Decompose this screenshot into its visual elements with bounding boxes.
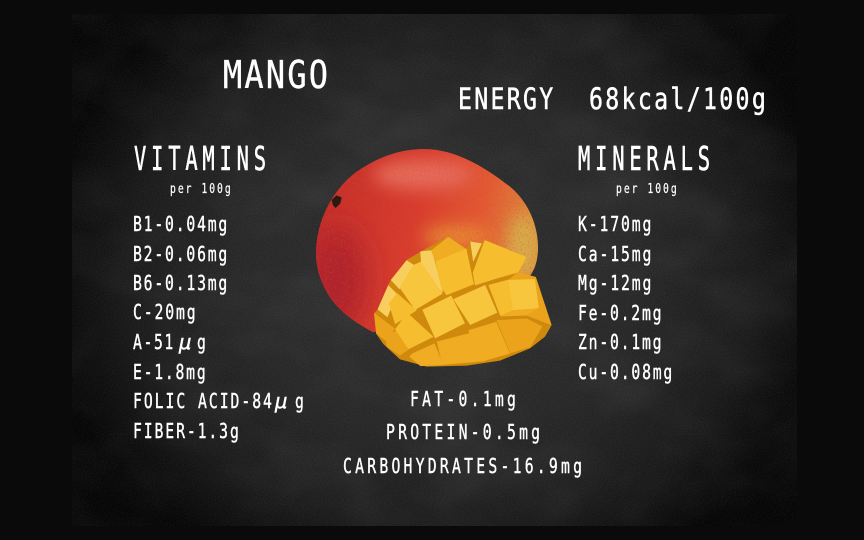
macronutrients: FAT-0.1mg: [410, 388, 516, 412]
vitamins list: [133, 213, 304, 444]
vitamins list: B6-0.13mg: [133, 272, 227, 296]
energy heading: ENERGY: [458, 84, 553, 117]
vitamins list: B2-0.06mg: [133, 243, 227, 267]
macronutrients: PROTEIN-0.5mg: [386, 421, 540, 445]
minerals list: Ca-15mg: [578, 243, 651, 267]
minerals list: Cu-0.08mg: [578, 361, 672, 385]
cut mango cheek: [374, 237, 552, 367]
macronutrients: CARBOHYDRATES-16.9mg: [343, 455, 582, 479]
minerals heading: MINERALS: [578, 141, 710, 178]
vitamins list: μ: [274, 389, 287, 413]
infographic canvas: [72, 14, 797, 526]
macronutrients: [343, 388, 582, 479]
minerals list: Fe-0.2mg: [578, 302, 662, 326]
vitamins list: C-20mg: [133, 301, 196, 325]
energy heading: [458, 84, 766, 117]
vitamins list: FOLIC ACID-84: [133, 390, 272, 414]
minerals list: Zn-0.1mg: [578, 331, 662, 355]
energy heading: 68kcal/100g: [589, 84, 766, 117]
vitamins list: μ: [178, 330, 191, 354]
vitamins list: FIBER-1.3g: [133, 420, 239, 444]
vitamins list: A-51: [133, 331, 173, 355]
panel: vitamins: [133, 141, 304, 444]
vitamins unit note: per 100g: [170, 181, 231, 196]
illustration: mango: [307, 143, 552, 367]
panel: minerals: [578, 141, 710, 385]
vitamins list: B1-0.04mg: [133, 213, 227, 237]
minerals list: K-170mg: [578, 213, 651, 237]
minerals unit note: per 100g: [616, 181, 677, 196]
vitamins heading: VITAMINS: [134, 141, 266, 178]
vitamins list: E-1.8mg: [133, 361, 206, 385]
cube cells: [375, 237, 551, 366]
title: MANGO: [223, 53, 328, 98]
whole mango skin: [316, 149, 538, 332]
vitamins list: g: [295, 390, 304, 414]
vitamins list: g: [197, 331, 206, 355]
minerals list: Mg-12mg: [578, 272, 651, 296]
mango stem scar: [332, 195, 342, 208]
minerals list: [578, 213, 672, 385]
